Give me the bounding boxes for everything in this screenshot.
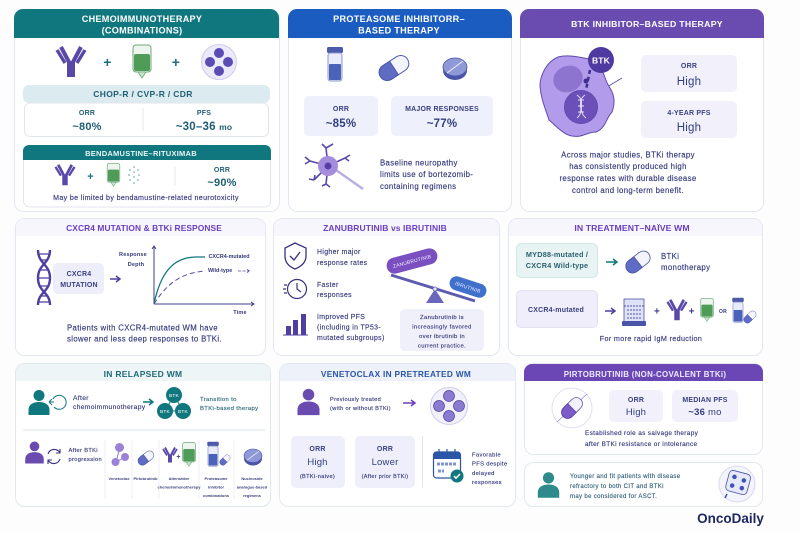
- heading: treatment-naive: [509, 219, 762, 236]
- box: MYD88-mutated: [516, 244, 598, 278]
- sub-panel: bendamustine-rituximab: [23, 145, 271, 207]
- panel header: proteasome inhibitor: [288, 9, 512, 38]
- panel header: BTK inhibitor: [520, 9, 764, 38]
- callout: zanubrutinib favored: Zanubrutinib is: [420, 315, 464, 321]
- option: alternative chemoimmunotherapy: [158, 442, 201, 490]
- text: after BTKi progression: [68, 448, 102, 463]
- heading: treatment-naive: IN TREATMENT–NAÏVE WM: [574, 223, 690, 233]
- icon: patient teal: [28, 390, 50, 415]
- option: proteasome inhibitor combinations: [203, 442, 231, 498]
- stat: ORR: [304, 96, 378, 136]
- line chart: response depth over time: Response: [119, 252, 147, 258]
- arrow: [110, 276, 120, 282]
- text: benefits list: Higher major: [317, 249, 361, 256]
- heading: zanubrutinib: [274, 219, 499, 236]
- arrow: [403, 400, 415, 406]
- stat box: ORR and PFS: ~80%: [72, 121, 102, 133]
- text: CXCR4 summary: slower and less deep responses to BTKi.: [67, 334, 222, 344]
- stat: 4-year PFS: 4-YEAR PFS: [667, 110, 711, 117]
- text: transition to BTKi: BTKi-based therapy: [200, 406, 258, 412]
- text: ASCT consideration: Younger and fit patients with disease: [570, 474, 681, 480]
- stat: ORR high: [291, 436, 345, 488]
- divider: [23, 429, 265, 431]
- line chart: response depth over time: CXCR4-mutated: [208, 254, 250, 260]
- text: salvage role: [585, 430, 699, 448]
- stat: ORR: [641, 55, 737, 92]
- text: ASCT consideration: refractory to both CIT and BTKi: [570, 484, 664, 490]
- text: benefits list: Improved PFS: [317, 314, 365, 321]
- text: favorable PFS: PFS despite: [472, 462, 507, 468]
- label: CXCR4 mutation: MUTATION: [60, 282, 98, 289]
- text: favorable PFS: responses: [472, 480, 502, 486]
- icon: DNA in nucleus: [577, 95, 586, 118]
- text: benefits list: mutated subgroups): [317, 335, 385, 342]
- stat: ORR lower: ORR: [377, 446, 393, 453]
- stat: 4-year PFS: High: [677, 122, 701, 134]
- panel header: pirtobrutinib: PIRTOBRUTINIB (NON-COVALENT BTKi): [564, 370, 726, 379]
- regimen bar: CHOP-R / CVP-R / CDR: [23, 85, 270, 103]
- arrow: [143, 399, 153, 405]
- option: nucleoside analogue: regimens: [243, 493, 262, 498]
- stat: ORR: ORR: [681, 63, 697, 70]
- stat: major responses: [391, 96, 493, 136]
- text: benefits list: Faster: [317, 282, 339, 289]
- text: neuropathy note: limits use of bortezomib-: [380, 170, 473, 179]
- box: CXCR4-mutated: CXCR4-mutated: [528, 307, 584, 314]
- illustration: balance scale: ZANUBRUTINIB: [392, 254, 432, 270]
- panel header: chemoimmunotherapy: CHEMOIMMUNOTHERAPY: [82, 14, 202, 24]
- label: or: OR: [719, 309, 727, 315]
- option dividers: [105, 440, 234, 499]
- stat: ORR high: (BTKi-naive): [300, 474, 335, 480]
- heading: venetoclax: VENETOCLAX IN PRETREATED WM: [321, 369, 471, 379]
- box: CXCR4-mutated: [516, 290, 598, 328]
- panel: ASCT note: [524, 462, 762, 506]
- icon: patient: [538, 472, 559, 498]
- option: proteasome inhibitor combinations: combinations: [203, 493, 230, 498]
- text: BTKi summary: response rates with durable disease: [559, 174, 697, 183]
- box: MYD88-mutated: CXCR4 Wild-type: [526, 261, 588, 270]
- arrow: [606, 259, 617, 265]
- heading: CXCR4: CXCR4 MUTATION & BTKi RESPONSE: [66, 223, 222, 233]
- line chart: response depth over time: Depth: [128, 262, 145, 268]
- icon: tablet: [443, 58, 467, 80]
- ORR stat: [175, 167, 237, 189]
- text: salvage role: Established role as salvage therapy: [585, 430, 699, 437]
- box: MYD88-mutated: MYD88-mutated /: [526, 250, 588, 259]
- callout: zanubrutinib favored: current practice.: [418, 344, 466, 350]
- icon: vial: [327, 47, 343, 81]
- plus sign: +: [103, 54, 112, 70]
- sub-panel: bendamustine-rituximab: BENDAMUSTINE–RITUXIMAB: [85, 149, 197, 158]
- option: venetoclax: Venetoclax: [109, 476, 130, 481]
- stat: ORR: [609, 390, 663, 422]
- stat: ORR: ORR: [628, 397, 644, 404]
- text: after BTKi progression: After BTKi: [68, 448, 98, 454]
- text: benefits list: response rates: [317, 260, 368, 267]
- icon: patient purple: [25, 442, 44, 464]
- text: ASCT consideration: [570, 474, 681, 500]
- text: salvage role: after BTKi resistance or intolerance: [585, 441, 698, 448]
- line chart: response depth over time: Time: [233, 310, 247, 316]
- stat: ORR: High: [626, 407, 646, 418]
- text: BTKi summary: Across major studies, BTKi therapy: [561, 150, 695, 160]
- panel: proteasome inhibitor: [288, 9, 512, 212]
- option: pirtobrutinib: Pirtobrutinib: [134, 476, 158, 481]
- heading: zanubrutinib: ZANUBRUTINIB vs IBRUTINIB: [323, 223, 447, 233]
- icon: infusion bag small: [107, 163, 120, 186]
- icon: dots: [128, 166, 140, 184]
- icon: BTK molecules: BTK: [178, 409, 189, 415]
- icon: stopwatch: [283, 280, 306, 298]
- stat box: ORR and PFS: ORR: [79, 110, 95, 117]
- text: BTKi monotherapy: BTKi: [661, 252, 679, 261]
- stat: median PFS: ~36 mo: [688, 407, 722, 418]
- stat box: ORR and PFS: [24, 103, 268, 136]
- line chart: response depth over time: [119, 246, 254, 316]
- icon: antibody: [667, 300, 687, 320]
- panel: BTK inhibitor: [520, 9, 764, 212]
- panel header: pirtobrutinib: [524, 364, 763, 381]
- stat: ORR: High: [677, 76, 701, 88]
- ORR stat: ~90%: [207, 177, 237, 189]
- text: benefits list: responses: [317, 292, 352, 299]
- panel header: BTK inhibitor: BTK INHIBITOR–BASED THERAPY: [571, 19, 723, 29]
- text: benefits list: (including in TP53-: [317, 324, 381, 332]
- panel: relapsed WM: [16, 364, 270, 506]
- stat box: ORR and PFS: PFS: [197, 110, 211, 117]
- illustration: cell with BTK and DNA: [540, 47, 622, 136]
- icon: tumor cells: [202, 44, 236, 80]
- panel: zanubrutinib vs ibrutinib: [274, 218, 500, 356]
- option: pirtobrutinib: [134, 449, 158, 481]
- text: CXCR4 summary: [67, 324, 222, 344]
- icon: chemotherapy machine: [622, 299, 646, 326]
- icon: antibody small: [55, 165, 75, 185]
- panel: CXCR4 mutation: [16, 218, 266, 356]
- option: alternative chemoimmunotherapy: Alternative: [169, 476, 190, 481]
- callout: zanubrutinib favored: [400, 309, 484, 351]
- plus sign: +: [689, 306, 695, 318]
- icon: infusion bag: [133, 45, 151, 78]
- line chart: response depth over time: Wild-type: [208, 268, 232, 274]
- BTK badge: BTK: [592, 56, 611, 66]
- panel header: proteasome inhibitor: PROTEASOME INHIBITORR–: [333, 14, 465, 24]
- icon: capsule small: [742, 309, 758, 325]
- option: nucleoside analogue: analogue-based: [237, 484, 268, 490]
- icon: capsule in circle: [552, 388, 592, 428]
- option: proteasome inhibitor combinations: inhibitor: [208, 484, 224, 490]
- stat: ORR lower: Lower: [372, 457, 398, 468]
- heading: CXCR4: [16, 219, 265, 236]
- arrow: [605, 308, 615, 314]
- text: BTKi monotherapy: monotherapy: [661, 263, 710, 272]
- text: BTKi summary: [559, 150, 697, 195]
- stat: ORR lower: [355, 436, 415, 488]
- panel header: chemoimmunotherapy: (COMBINATIONS): [102, 26, 182, 36]
- text: after chemoimmunotherapy: chemoimmunotherapy: [73, 404, 146, 411]
- regimen bar: CHOP-R / CVP-R / CDR: CHOP-R / CVP-R / CDR: [93, 89, 193, 99]
- plus sign: +: [87, 171, 94, 183]
- plus sign: +: [172, 54, 180, 70]
- divider: [422, 436, 424, 487]
- stat: major responses: MAJOR RESPONSES: [405, 106, 479, 113]
- icon: capsule: [623, 248, 653, 276]
- text: benefits list: [317, 249, 385, 342]
- callout: zanubrutinib favored: over ibrutinib in: [419, 334, 465, 340]
- text: favorable PFS: delayed: [472, 471, 495, 477]
- text: BTKi summary: has consistently produced high: [569, 162, 687, 171]
- option: venetoclax: [109, 443, 130, 481]
- text: BTKi monotherapy: [661, 252, 710, 272]
- panel: venetoclax: [280, 364, 516, 506]
- plus sign: +: [654, 306, 660, 318]
- option: nucleoside analogue: [237, 449, 268, 498]
- stat: ORR: ~85%: [326, 118, 356, 130]
- icon: patient: [297, 389, 320, 415]
- text: neuropathy note: [380, 158, 473, 191]
- text: CXCR4 summary: Patients with CXCR4-mutated WM have: [67, 324, 218, 332]
- option: alternative chemoimmunotherapy: +: [176, 454, 181, 461]
- icon: capsule: [376, 52, 412, 84]
- illustration: balance scale: [385, 247, 488, 303]
- stat: ORR high: ORR: [309, 446, 326, 453]
- logo: OncoDaily: OncoDaily: [697, 511, 764, 526]
- stat: ORR: ORR: [333, 106, 349, 113]
- icon: BTK molecules: [157, 387, 191, 419]
- icon: BTK molecules: BTK: [169, 393, 180, 399]
- option: alternative chemoimmunotherapy: chemoimmunotherapy: [158, 484, 201, 490]
- icon: BTK molecules: BTK: [160, 409, 171, 415]
- icon: calendar with check: [434, 449, 464, 482]
- text: ASCT consideration: may be considered for ASCT.: [570, 494, 657, 500]
- heading: relapsed WM: IN RELAPSED WM: [104, 369, 182, 379]
- text: previously treated: [330, 397, 391, 412]
- icon: antibody: [57, 47, 85, 77]
- heading: venetoclax: [280, 364, 515, 381]
- stat: major responses: ~77%: [427, 118, 457, 130]
- text: favorable PFS: [472, 452, 507, 486]
- icon: bars: [283, 314, 308, 336]
- option: proteasome inhibitor combinations: Proteasome: [205, 476, 228, 481]
- text: BTKi summary: control and long-term benefit.: [572, 186, 684, 195]
- text: after BTKi progression: progression: [68, 457, 102, 463]
- heading: relapsed WM: [16, 364, 270, 381]
- note: neurotoxicity: May be limited by bendamustine-related neurotoxicity: [53, 194, 239, 202]
- icon: vial: [732, 298, 744, 322]
- icon: refresh arrows: [48, 449, 60, 464]
- text: previously treated: Previously treated: [330, 397, 381, 403]
- label: CXCR4 mutation: CXCR4: [67, 271, 91, 278]
- stat: 4-year PFS: [641, 101, 737, 138]
- icon: shield: [285, 243, 306, 269]
- icon: neuron: [305, 144, 363, 189]
- icon: cycle arrow: [49, 395, 66, 409]
- icon: tumor cells: [430, 388, 468, 424]
- panel: pirtobrutinib: [524, 364, 763, 454]
- callout: zanubrutinib favored: increasingly favored: [412, 324, 472, 330]
- option: nucleoside analogue: Nucleoside: [241, 476, 263, 481]
- panel header: proteasome inhibitor: BASED THERAPY: [358, 26, 440, 36]
- stat box: ORR and PFS: ~30–36 mo: [176, 121, 232, 133]
- icon: stem cell bag: [719, 466, 755, 502]
- stat: median PFS: [672, 390, 738, 422]
- text: after chemoimmunotherapy: [73, 395, 146, 411]
- stat: ORR lower: (After prior BTKi): [362, 474, 408, 480]
- text: favorable PFS: Favorable: [472, 452, 501, 458]
- text: previously treated: (with or without BTKi): [330, 406, 391, 412]
- icon: DNA helix: [38, 250, 50, 305]
- text: neuropathy note: containing regimens: [380, 182, 456, 191]
- text: after chemoimmunotherapy: After: [73, 395, 89, 402]
- label: CXCR4 mutation: [53, 263, 104, 294]
- stat: ORR high: High: [307, 457, 328, 468]
- stat: median PFS: MEDIAN PFS: [682, 397, 728, 404]
- ORR stat: ORR: [214, 167, 230, 174]
- text: transition to BTKi: Transition to: [200, 397, 237, 403]
- panel header: chemoimmunotherapy: [14, 9, 279, 38]
- illustration: balance scale: IBRUTINIB: [454, 281, 482, 295]
- icon: infusion bag: [701, 298, 713, 321]
- panel: treatment-naive WM: [508, 218, 762, 356]
- text: rapid IgM reduction: For more rapid IgM reduction: [600, 334, 702, 343]
- text: neuropathy note: Baseline neuropathy: [380, 158, 458, 168]
- text: transition to BTKi: [200, 397, 258, 412]
